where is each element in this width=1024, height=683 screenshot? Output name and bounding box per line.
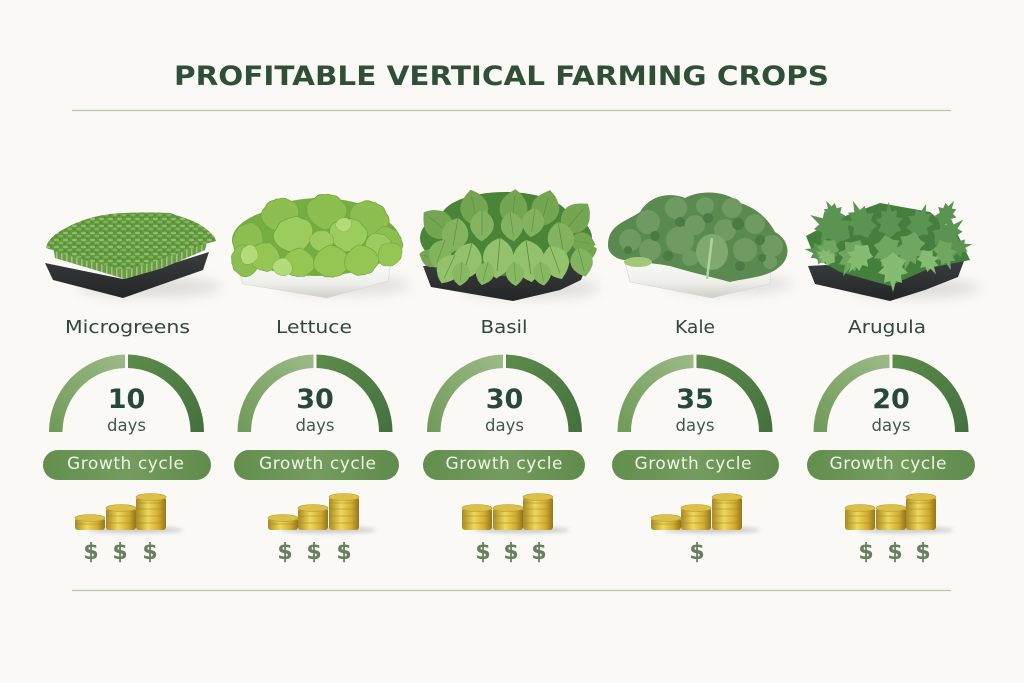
rating: dollars: $ [112, 540, 128, 565]
rating: dollars: $ [503, 540, 519, 565]
pill: growth cycle: Growth cycle [446, 454, 562, 474]
icon: coins [75, 494, 183, 533]
icon: coins [268, 494, 376, 533]
panel: lettuce [227, 192, 410, 565]
gauge: 30 days [427, 354, 582, 435]
rating: dollars: $ [858, 540, 874, 565]
gauge: 30 days: 30 [486, 384, 523, 415]
gauge: 30 days: days [485, 416, 524, 435]
rating: dollars [475, 540, 547, 565]
rating: dollars: $ [887, 540, 903, 565]
image: arugula tray [802, 195, 980, 301]
pill: growth cycle [43, 450, 211, 480]
gauge: 20 days [814, 354, 968, 435]
pill: growth cycle [612, 450, 779, 480]
gauge: 35 days [618, 354, 772, 435]
pill: growth cycle: Growth cycle [67, 454, 184, 474]
gauge: 30 days: days [296, 416, 334, 435]
icon: coins [845, 494, 954, 533]
icon: coins [462, 494, 570, 533]
pill: growth cycle [423, 450, 585, 480]
pill: growth cycle: Growth cycle [259, 454, 376, 474]
rating: dollars: $ [277, 540, 293, 565]
rating: dollars: $ [531, 540, 547, 565]
pill: growth cycle [234, 450, 399, 480]
pill: growth cycle: Growth cycle [830, 454, 946, 474]
label: Microgreens: Microgreens [65, 317, 190, 338]
gauge: 35 days: 35 [676, 384, 714, 415]
rating: dollars: $ [475, 540, 491, 565]
rating: dollars: $ [142, 540, 158, 565]
rating: dollar: $ [689, 540, 705, 565]
gauge: 30 days [238, 354, 392, 435]
rating: dollars [277, 540, 352, 565]
rating: dollars [858, 540, 931, 565]
label: Basil: Basil [480, 317, 528, 338]
label: Kale: Kale [675, 317, 715, 338]
rating: dollars: $ [306, 540, 322, 565]
image: kale tray [608, 193, 792, 298]
image: microgreens tray [45, 212, 222, 298]
rating: dollars: $ [915, 540, 931, 565]
icon: coins [651, 494, 760, 533]
label: Lettuce: Lettuce [276, 317, 352, 338]
panel: basil [415, 187, 600, 565]
gauge: 10 days: days [107, 416, 146, 435]
gauge: 10 days [49, 354, 204, 435]
image: basil tray [415, 187, 600, 301]
pill: growth cycle: Growth cycle [634, 454, 752, 474]
image: lettuce tray [227, 192, 410, 298]
rating: dollars: $ [336, 540, 352, 565]
gauge: 20 days: days [872, 416, 910, 435]
gauge: 30 days: 30 [296, 384, 334, 415]
panel: kale [608, 193, 792, 565]
gauge: 35 days: days [676, 416, 714, 435]
panel: microgreens [43, 212, 222, 565]
gauge: 10 days: 10 [108, 384, 145, 415]
title: PROFITABLE VERTICAL FARMING CROPS [174, 61, 829, 92]
rating: dollars: $ [83, 540, 99, 565]
panel: arugula [802, 195, 980, 565]
pill: growth cycle [807, 450, 975, 480]
label: Arugula: Arugula [848, 317, 926, 338]
rating: dollars [83, 540, 158, 565]
gauge: 20 days: 20 [872, 384, 910, 415]
